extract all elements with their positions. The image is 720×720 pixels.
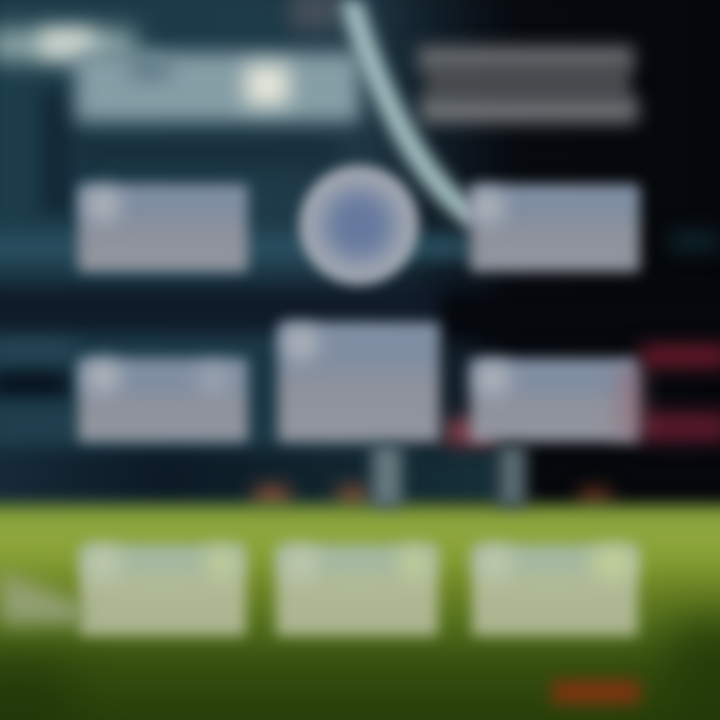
pitch xyxy=(0,504,720,720)
left dark column xyxy=(40,90,74,215)
panel: row 3 right xyxy=(472,544,638,636)
goal post right xyxy=(498,445,526,507)
top left hot spot xyxy=(40,30,94,56)
title line right 1 xyxy=(418,46,634,70)
teal band behind row 1 xyxy=(0,234,480,260)
teal glint at right xyxy=(670,232,720,250)
top band highlight xyxy=(290,0,340,30)
title block left xyxy=(75,52,360,122)
dark stand spots row 1 xyxy=(80,135,340,169)
center circle badge xyxy=(299,165,419,285)
pitch dark corner xyxy=(670,620,720,720)
background: stadium night sky xyxy=(0,0,720,510)
title line right gap fill xyxy=(425,66,630,100)
top left glow xyxy=(0,30,135,60)
goal post xyxy=(372,445,402,507)
pitch dark corner left xyxy=(0,670,70,720)
panel: row 3 left xyxy=(80,544,246,636)
lower stand band right xyxy=(525,450,720,502)
panel: row 2 center xyxy=(278,322,440,442)
title line right 2 xyxy=(420,97,638,123)
lower stand band xyxy=(0,448,500,506)
logo bottom right xyxy=(552,680,640,704)
dark band right xyxy=(440,290,720,340)
title highlight xyxy=(245,65,289,105)
panel: row 2 left xyxy=(78,358,248,442)
panel: row 1 left xyxy=(78,184,248,272)
panel fringe pink xyxy=(616,366,646,440)
badge inner xyxy=(323,189,395,261)
panel: row 1 right xyxy=(470,184,640,272)
dark band between rows xyxy=(0,284,490,334)
title gap xyxy=(130,58,170,80)
panel: row 3 center xyxy=(276,544,438,636)
panel: row 2 right xyxy=(470,358,638,442)
